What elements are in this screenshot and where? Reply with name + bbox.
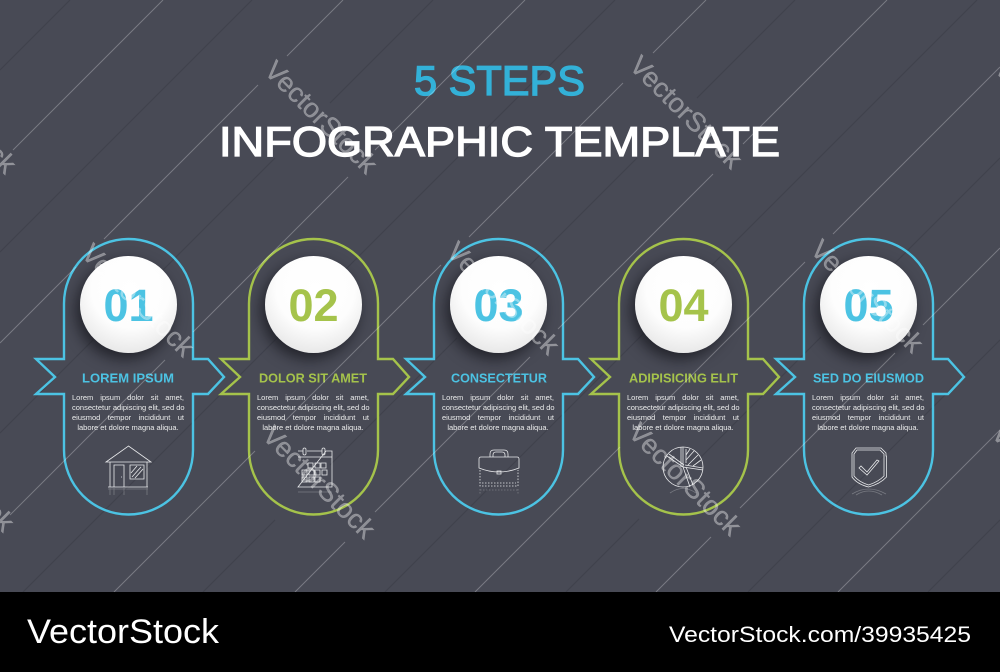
icon: shield with check <box>852 448 887 496</box>
footer brand and image id: VectorStock <box>27 613 220 651</box>
body text <box>257 393 370 432</box>
number circle 03: 03 <box>473 280 524 330</box>
number circle 04: 04 <box>658 280 709 330</box>
panel: step 03 <box>403 238 596 516</box>
number circle 05 <box>820 256 917 352</box>
body text: Lorem ipsum dolor sit amet, <box>442 393 554 402</box>
body text: Lorem ipsum dolor sit amet, <box>72 393 184 402</box>
number circle 05: 05 <box>843 280 894 330</box>
body text: consectetur adipiscing elit, sed do <box>72 403 185 412</box>
body text: eiusmod tempor incididunt ut <box>627 413 739 422</box>
footer brand and image id <box>27 613 971 651</box>
number circle 04 <box>635 256 732 352</box>
heading: ADIPISICING ELIT <box>629 372 738 386</box>
body text: eiusmod tempor incididunt ut <box>72 413 184 422</box>
body text: Lorem ipsum dolor sit amet, <box>257 393 369 402</box>
body text <box>812 393 925 432</box>
watermark overlay: VectorStock <box>624 50 749 175</box>
title line: infographic template: INFOGRAPHIC TEMPLATE <box>219 118 780 165</box>
ribbon capsule outline <box>403 238 596 516</box>
body text <box>72 393 185 432</box>
watermark overlay: VectorStock <box>805 234 930 359</box>
heading: LOREM IPSUM <box>82 372 174 386</box>
panel: step 04 <box>588 238 780 516</box>
title line: 5 steps: 5 STEPS <box>414 57 585 104</box>
body text: labore et dolore magna aliqua. <box>447 423 549 432</box>
watermark overlay: VectorStock <box>257 420 382 545</box>
number circle 03 <box>450 256 547 352</box>
body text <box>442 393 555 432</box>
panel: step 02 <box>218 238 410 516</box>
number circle 01 <box>80 256 177 352</box>
body text <box>627 393 740 432</box>
number circle 01: 01 <box>103 280 154 330</box>
body text: eiusmod tempor incididunt ut <box>257 413 369 422</box>
heading: CONSECTETUR <box>451 372 547 386</box>
ribbon capsule outline <box>33 238 226 516</box>
body text: Lorem ipsum dolor sit amet, <box>812 393 924 402</box>
body text: consectetur adipiscing elit, sed do <box>627 403 740 412</box>
number circle 02 <box>265 256 362 352</box>
watermark overlay: VectorStock <box>76 238 201 363</box>
ribbon capsule outline <box>218 238 410 516</box>
body text: consectetur adipiscing elit, sed do <box>442 403 555 412</box>
heading: DOLOR SIT AMET <box>259 372 367 386</box>
panel: step 01 <box>33 238 226 516</box>
icon: pie chart <box>662 446 704 494</box>
ribbon capsule outline <box>773 238 966 516</box>
footer brand and image id: VectorStock.com/39935425 <box>669 622 971 647</box>
body text: labore et dolore magna aliqua. <box>262 423 364 432</box>
title <box>219 57 780 165</box>
body text: eiusmod tempor incididunt ut <box>442 413 554 422</box>
icon: house <box>104 446 152 495</box>
ribbon capsule outline <box>588 238 780 516</box>
body text: consectetur adipiscing elit, sed do <box>812 403 925 412</box>
body text: eiusmod tempor incididunt ut <box>812 413 924 422</box>
number circle 02: 02 <box>288 280 339 330</box>
body text: labore et dolore magna aliqua. <box>817 423 919 432</box>
body text: consectetur adipiscing elit, sed do <box>257 403 370 412</box>
panel: step 05 <box>773 238 966 516</box>
icon: briefcase <box>478 450 520 494</box>
body text: Lorem ipsum dolor sit amet, <box>627 393 739 402</box>
watermark overlay: VectorStock <box>259 55 384 180</box>
body text: labore et dolore magna aliqua. <box>632 423 734 432</box>
watermark overlay: VectorStock <box>623 417 748 542</box>
watermark overlay: VectorStock <box>441 236 566 361</box>
icon: calendar <box>297 448 332 492</box>
footer bar <box>0 592 1000 672</box>
body text: labore et dolore magna aliqua. <box>77 423 179 432</box>
heading: SED DO EIUSMOD <box>813 372 924 386</box>
